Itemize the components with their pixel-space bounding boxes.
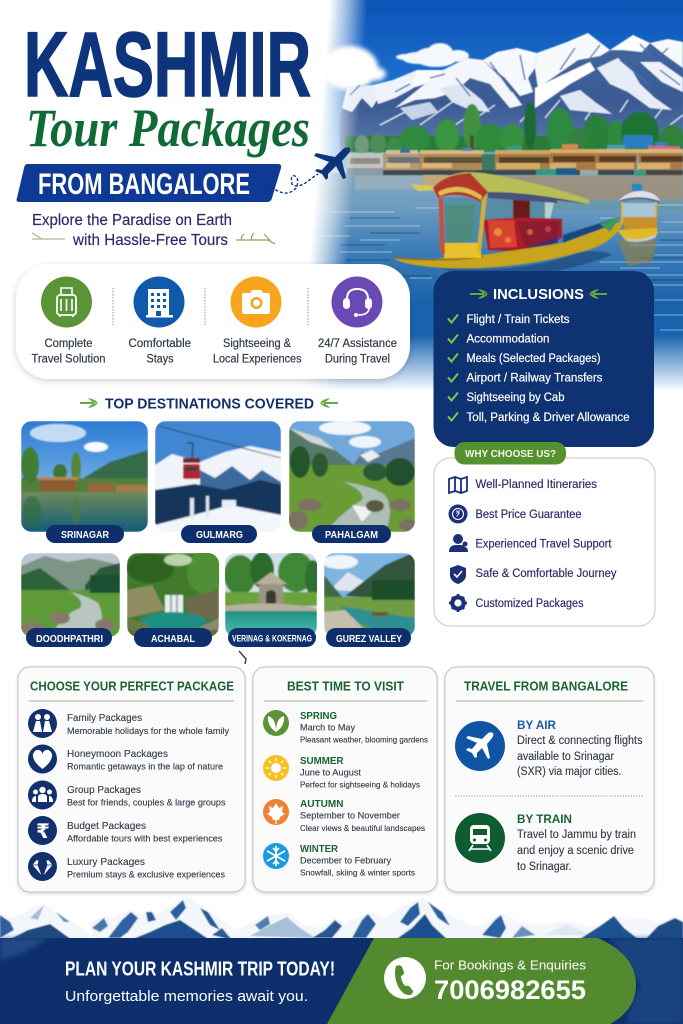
winter — [263, 843, 415, 878]
item: honeymoon packages — [67, 748, 223, 772]
check list — [448, 314, 630, 424]
icon: hotel building — [134, 276, 184, 328]
label: VERINAG & KOKERNAG — [232, 634, 312, 644]
trees — [345, 102, 683, 155]
icon: suitcase — [41, 276, 92, 328]
heading: CHOOSE YOUR PERFECT PACKAGE — [30, 680, 234, 694]
heading: BEST TIME TO VISIT — [287, 680, 404, 694]
label: GULMARG — [196, 530, 243, 541]
by train: and enjoy a scenic drive — [517, 845, 634, 857]
panel: inclusions — [434, 271, 654, 447]
summer: Perfect for sightseeing & holidays — [300, 780, 420, 790]
tagline — [32, 212, 275, 249]
check list: Accommodation — [466, 334, 550, 346]
labels — [32, 338, 397, 366]
icon: diamond — [28, 852, 57, 881]
labels: Sightseeing & — [223, 338, 291, 350]
icon: heart — [28, 744, 57, 774]
heading: TRAVEL FROM BANGALORE — [464, 680, 628, 694]
destination: Verinag & Kokernag — [224, 552, 321, 647]
contact panel: 7006982655 — [434, 975, 586, 1005]
item: family packages — [67, 712, 229, 736]
spring: SPRING — [300, 710, 337, 722]
icon: plane with dashed route — [263, 147, 350, 193]
snow fields — [342, 85, 380, 112]
check list: Flight / Train Tickets — [466, 314, 570, 326]
heading: INCLUSIONS — [493, 286, 584, 303]
call to action — [65, 958, 335, 1005]
autumn — [263, 798, 425, 833]
labels: 24/7 Assistance — [318, 338, 397, 350]
labels: During Travel — [325, 354, 390, 366]
icon: price badge — [448, 504, 468, 524]
icon: headset — [332, 276, 382, 328]
winter: December to February — [300, 856, 391, 866]
icon: people — [449, 534, 468, 552]
item: family packages: Family Packages — [67, 712, 142, 724]
heading: top destinations: TOP DESTINATIONS COVERED — [105, 396, 314, 412]
summer: SUMMER — [300, 755, 344, 767]
by air: Direct & connecting flights — [517, 735, 643, 747]
summer: June to August — [300, 768, 361, 778]
panel: highlights — [16, 264, 410, 379]
by train: to Srinagar. — [517, 861, 572, 873]
heading — [470, 286, 607, 303]
autumn: AUTUMN — [300, 798, 344, 810]
footer — [0, 938, 683, 1024]
by train: Travel to Jammu by train — [517, 829, 636, 841]
by train: BY TRAIN — [517, 812, 572, 826]
destination: Gulmarg — [155, 421, 281, 543]
list: Safe & Comfortable Journey — [476, 568, 617, 580]
tagline: Explore the Paradise on Earth — [32, 212, 232, 229]
by air: BY AIR — [517, 718, 556, 732]
icon: rupee: ₹ — [36, 819, 50, 843]
item: luxury packages: Premium stays & exclusive experiences — [67, 870, 225, 880]
call to action: PLAN YOUR KASHMIR TRIP TODAY! — [65, 958, 335, 980]
labels: Comfortable — [128, 338, 191, 350]
shikara boat main — [393, 172, 627, 280]
small boat behind — [410, 175, 450, 191]
water — [300, 173, 683, 390]
item: family packages: Memorable holidays for the whole family — [67, 726, 229, 736]
icon: group — [28, 780, 57, 810]
icon: camera — [230, 276, 282, 328]
list: Best Price Guarantee — [476, 509, 582, 521]
icon: map — [449, 477, 467, 493]
panel: best time to visit — [253, 667, 437, 892]
reflections and ripples — [355, 176, 683, 210]
destination: Gurez Valley — [322, 552, 415, 647]
subtitle: Tour Packages: Tour Packages — [26, 98, 310, 158]
destination: Doodhpathri — [20, 553, 120, 647]
badge — [454, 442, 566, 464]
item: honeymoon packages: Honeymoon Packages — [67, 748, 168, 760]
list: Experienced Travel Support — [476, 538, 612, 550]
tagline: with Hassle-Free Tours — [72, 232, 228, 249]
hero photo: lake, mountains and shikaras — [290, 0, 683, 392]
item: honeymoon packages: Romantic getaways in the lap of nature — [67, 762, 223, 772]
icon: gear — [449, 594, 467, 612]
check list: Toll, Parking & Driver Allowance — [466, 412, 630, 424]
shikara boat small — [617, 184, 661, 266]
spring: Pleasant weather, blooming gardens — [300, 734, 428, 744]
item: group packages: Group Packages — [67, 784, 141, 796]
item: budget packages — [67, 820, 223, 844]
check list: Sightseeing by Cab — [466, 392, 564, 404]
winter: Snowfall, skiing & winter sports — [300, 868, 415, 878]
list — [476, 479, 617, 610]
stray pointer mark — [239, 651, 246, 664]
destination: Achabal — [126, 550, 223, 647]
item: budget packages: Budget Packages — [67, 820, 146, 832]
title: KASHMIR: KASHMIR — [24, 14, 311, 116]
contact panel: For Bookings & Enquiries — [434, 958, 587, 972]
autumn: September to November — [300, 810, 400, 822]
labels: Travel Solution — [32, 354, 106, 366]
by air: available to Srinagar — [517, 751, 614, 763]
label: GUREZ VALLEY — [336, 634, 402, 645]
item: group packages: Best for friends, couples & large groups — [67, 798, 226, 808]
spring — [263, 710, 428, 744]
winter: WINTER — [300, 843, 338, 855]
icon: shield — [450, 565, 466, 584]
labels: Complete — [44, 338, 92, 350]
destination: Pahalgam — [288, 421, 417, 543]
label: ACHABAL — [151, 634, 195, 645]
by air — [455, 718, 643, 778]
destination: Srinagar — [21, 421, 148, 543]
list: Customized Packages — [476, 598, 584, 610]
summer — [263, 755, 420, 790]
icon: phone — [384, 957, 426, 999]
labels: Local Experiences — [213, 354, 302, 366]
fade overlays — [290, 0, 390, 392]
contact panel — [327, 938, 636, 1024]
item: budget packages: Affordable tours with best experiences — [67, 834, 223, 844]
houseboats — [347, 135, 683, 176]
list: Well-Planned Itineraries — [476, 479, 597, 491]
spring: March to May — [300, 722, 355, 734]
item: luxury packages: Luxury Packages — [67, 856, 145, 868]
mountain band — [0, 896, 683, 950]
labels: Stays — [146, 354, 174, 366]
call to action: Unforgettable memories await you. — [65, 988, 308, 1005]
icon: rupee — [28, 816, 57, 845]
by train — [455, 812, 636, 873]
label: DOODHPATHRI — [36, 634, 103, 645]
banner: from Bangalore: FROM BANGALORE — [38, 168, 250, 201]
check list: Meals (Selected Packages) — [466, 353, 601, 365]
badge: WHY CHOOSE US? — [465, 448, 556, 460]
by air: (SXR) via major cities. — [517, 766, 622, 778]
item: group packages — [67, 784, 226, 808]
panel: why choose us — [434, 442, 655, 626]
panel: choose your perfect package — [18, 667, 245, 892]
autumn: Clear views & beautiful landscapes — [300, 823, 425, 833]
icon: family — [28, 709, 57, 738]
item: luxury packages — [67, 856, 225, 880]
panel: travel from Bangalore — [445, 667, 654, 892]
check list: Airport / Railway Transfers — [466, 372, 603, 384]
label: PAHALGAM — [325, 530, 378, 541]
banner: from Bangalore — [16, 164, 281, 202]
label: SRINAGAR — [61, 530, 110, 541]
ridge streaks — [350, 44, 680, 96]
